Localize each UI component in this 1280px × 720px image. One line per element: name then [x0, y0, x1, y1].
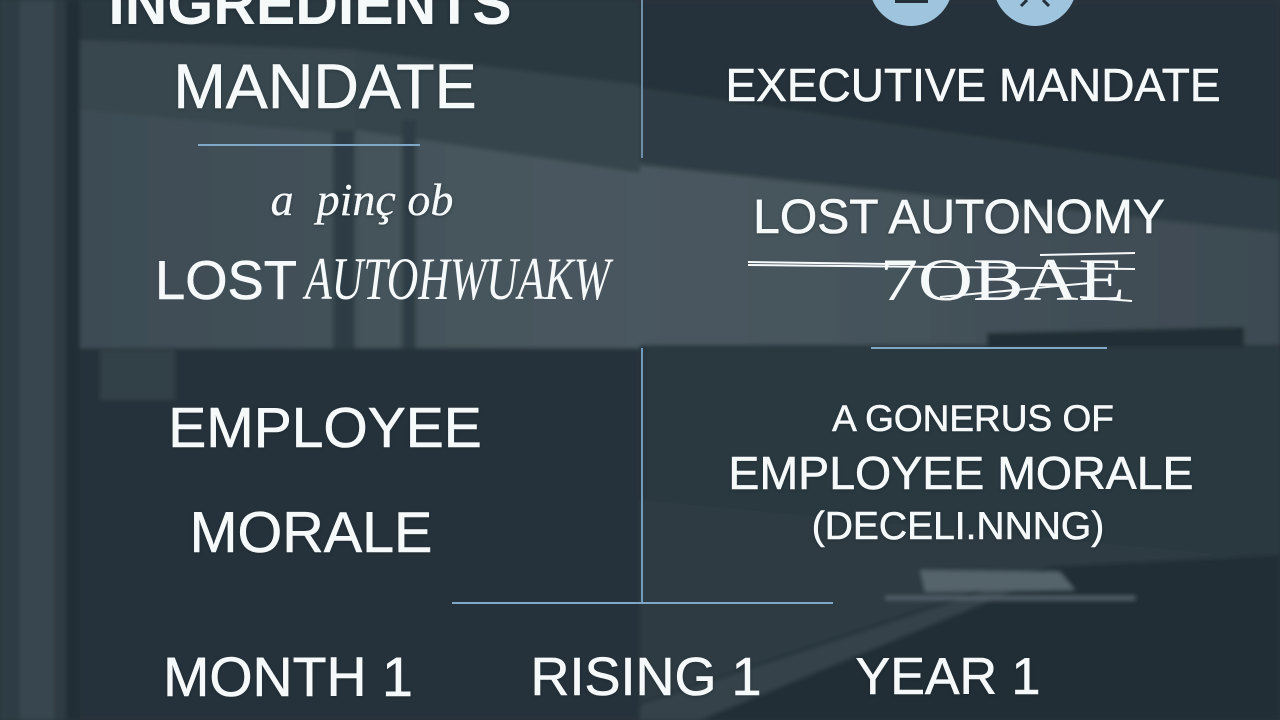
- left underline: [198, 144, 420, 146]
- timeline label: month 1: MONTH 1: [163, 646, 413, 708]
- right label: executive mandate: EXECUTIVE MANDATE: [726, 59, 1220, 111]
- lower regions: [80, 348, 640, 720]
- left label: lost autonomy, garbled: LOST: [155, 249, 297, 311]
- left column: [0, 0, 80, 720]
- left label: employee: EMPLOYEE: [168, 396, 482, 460]
- left label: mandate: MANDATE: [173, 52, 477, 122]
- right label: lost autonomy: LOST AUTONOMY: [753, 191, 1165, 244]
- right label: garbled scrawl: 7OBAE: [880, 247, 1125, 313]
- timeline label: year 1: YEAR 1: [856, 648, 1040, 706]
- right label: a generous of: A GONERUS OF: [832, 398, 1114, 439]
- timeline label: rising 1: RISING 1: [530, 647, 762, 707]
- icon: person badge: [993, 0, 1077, 26]
- timeline rule: [452, 602, 833, 604]
- right label: garbled scrawl: [748, 247, 1135, 313]
- left label: lost autonomy, garbled: [155, 246, 614, 312]
- center vertical divider, upper: [641, 0, 643, 158]
- center vertical divider, lower: [641, 348, 643, 603]
- right upper bands: [640, 0, 1280, 350]
- right underline: [871, 347, 1107, 349]
- icon: document badge: [869, 0, 953, 26]
- left label: morale: MORALE: [190, 501, 432, 565]
- icons: two circular badges cropped by top edge: [872, 0, 1074, 26]
- right label: declining: (DECELI.NNNG): [812, 505, 1104, 548]
- right label: employee morale: EMPLOYEE MORALE: [728, 447, 1194, 499]
- left upper wall: [80, 40, 640, 350]
- left label: a pinch of: a pinç ob: [271, 174, 453, 225]
